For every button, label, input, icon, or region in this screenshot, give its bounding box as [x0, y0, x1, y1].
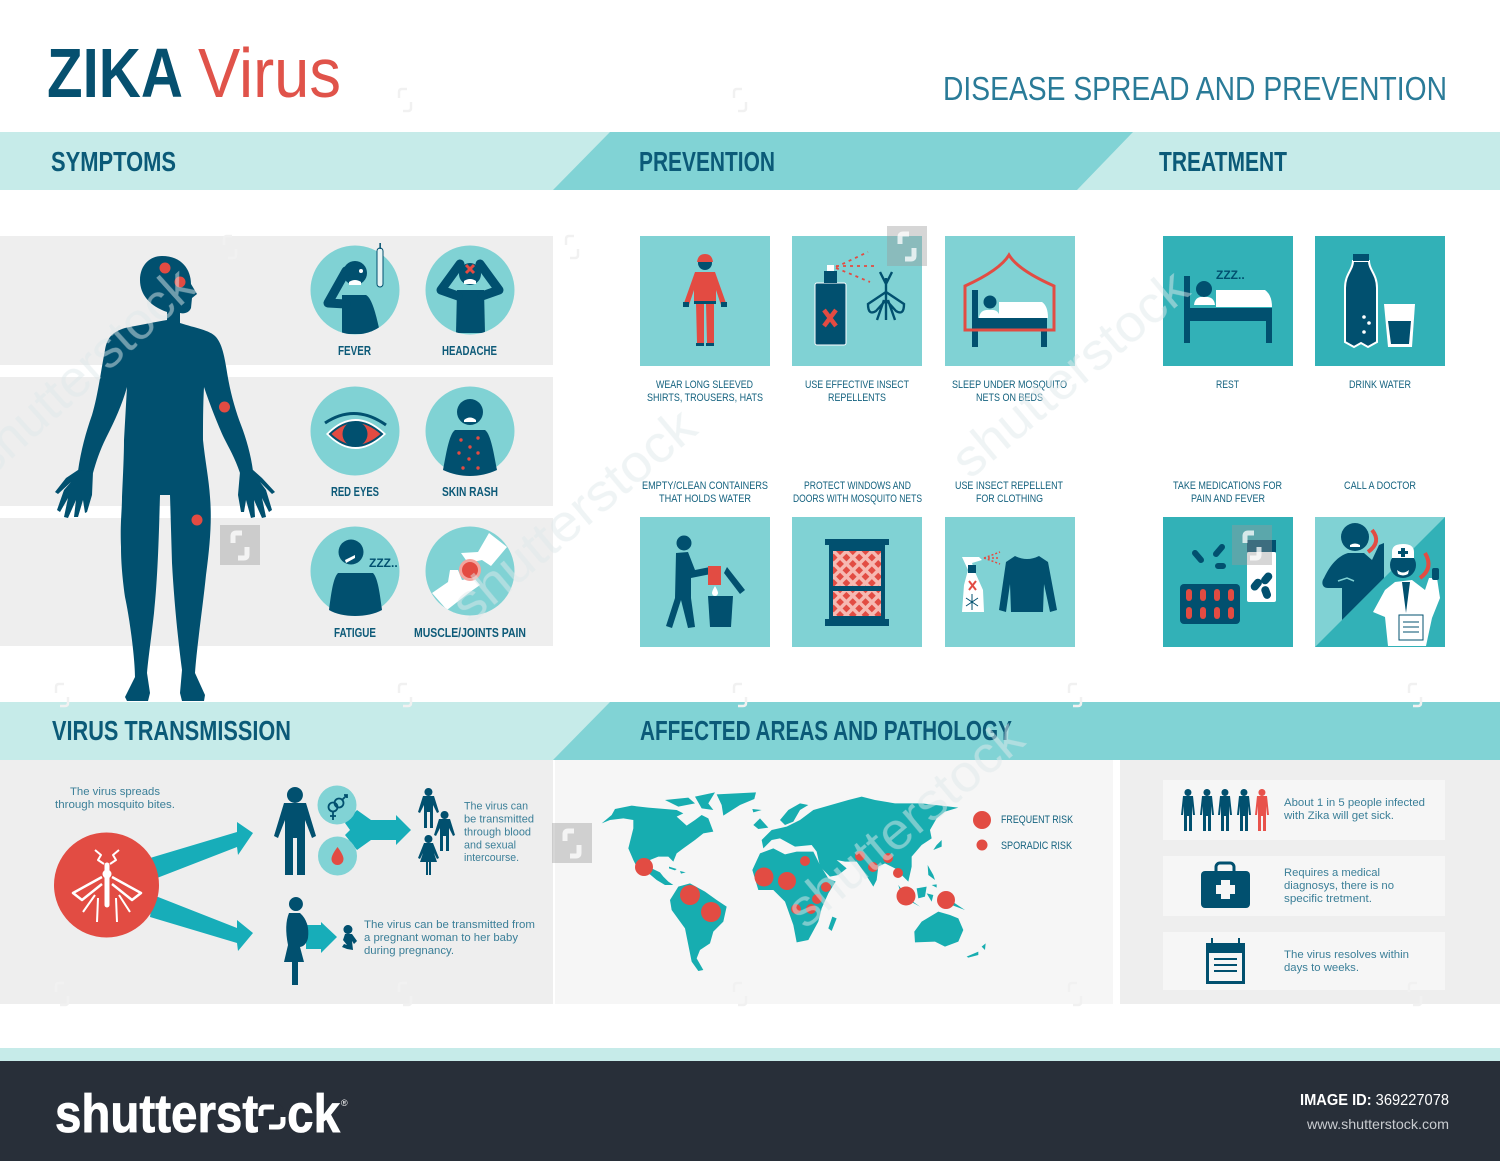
section header band: transmission and areas: VIRUS TRANSMISSION [52, 715, 291, 746]
tile: repellent for clothing: FOR CLOTHING [976, 493, 1043, 505]
tile: repellent for clothing [945, 480, 1075, 647]
card: medical diagnosis: diagnosys, there is no [1284, 880, 1394, 892]
arrow: to human transmission [150, 822, 253, 878]
panel: affected areas map [555, 760, 1113, 1004]
icon: fatigue [310, 526, 400, 640]
tile: call a doctor: CALL A DOCTOR [1344, 480, 1416, 492]
icon: muscle and joints pain: MUSCLE/JOINTS PAIN [414, 625, 526, 640]
arrow: combined transmission [345, 810, 411, 850]
human body silhouette with red symptom points [55, 256, 275, 701]
icon: fatigue: FATIGUE [334, 625, 376, 640]
title: Virus [198, 34, 341, 112]
icon: fever [310, 243, 400, 358]
icon: family [418, 788, 455, 875]
icon: headache [426, 246, 514, 358]
map legend: SPORADIC RISK [1001, 840, 1073, 852]
icon: baby [342, 925, 357, 950]
map legend [973, 811, 1074, 852]
card: medical diagnosis: specific tretment. [1284, 893, 1372, 905]
icon: fever: FEVER [338, 343, 371, 358]
icon: muscle and joints pain [414, 526, 526, 640]
tile: insect repellent [792, 236, 922, 404]
tile: protect windows and doors: PROTECT WINDOWS AND [804, 480, 911, 492]
tile: drink water [1315, 236, 1445, 391]
tile: wear long sleeved clothing: WEAR LONG SLEEVED [656, 379, 753, 391]
tile: insect repellent: REPELLENTS [828, 392, 886, 404]
footer band: IMAGE ID: 369227078 [1300, 1092, 1449, 1109]
text: blood and sexual transmission: be transmitted [464, 814, 534, 826]
section header band: symptoms, prevention, treatment [0, 132, 1500, 190]
tile: rest: REST [1216, 379, 1239, 391]
section header band: symptoms, prevention, treatment: PREVENTION [639, 146, 775, 177]
icon: mosquito in red circle [54, 832, 159, 938]
tile: repellent for clothing: USE INSECT REPELLENT [955, 480, 1063, 492]
section header band: transmission and areas: AFFECTED AREAS AND PATHOLOGY [640, 715, 1012, 746]
icon: fatigue: ZZZ.. [369, 556, 398, 570]
icon: skin rash: SKIN RASH [442, 484, 498, 499]
text: pregnancy transmission: during pregnancy. [364, 945, 454, 957]
card: resolves within days [1163, 932, 1445, 990]
tile: protect windows and doors: DOORS WITH MOSQUITO NETS [793, 493, 922, 505]
section header band: transmission and areas [0, 702, 1500, 760]
card: 1 in 5 people: with Zika will get sick. [1283, 810, 1394, 822]
tile: take medications: PAIN AND FEVER [1191, 493, 1265, 505]
text: mosquito bites: The virus spreads [70, 786, 161, 798]
watermark overlay: shutterstock [775, 708, 1036, 939]
icon: pregnant woman [284, 897, 308, 985]
text: mosquito bites [55, 786, 175, 811]
card: medical diagnosis [1163, 856, 1445, 916]
tile: insect repellent: USE EFFECTIVE INSECT [805, 379, 909, 391]
world map [602, 792, 986, 971]
icon: headache: HEADACHE [442, 343, 497, 358]
doctor on the phone [1373, 544, 1440, 646]
watermark overlay: shutterstock [940, 258, 1201, 489]
section header band: symptoms, prevention, treatment: SYMPTOMS [51, 146, 176, 177]
icon: sex symbol circle [318, 786, 356, 824]
footer band: www.shutterstock.com [1306, 1116, 1449, 1132]
tile: take medications: TAKE MEDICATIONS FOR [1173, 480, 1282, 492]
text: blood and sexual transmission: and sexual [464, 840, 516, 852]
tile: take medications [1163, 480, 1293, 647]
tile: empty containers: EMPTY/CLEAN CONTAINERS [642, 480, 768, 492]
footer band [0, 1048, 1500, 1161]
left hand [55, 470, 93, 518]
title: ZIKA [47, 34, 183, 112]
map legend: FREQUENT RISK [1001, 814, 1074, 826]
tile: call a doctor [1315, 480, 1445, 647]
text: blood and sexual transmission: The virus can [464, 800, 528, 812]
panel: virus transmission [0, 760, 553, 1004]
panel: pathology [1120, 760, 1500, 1004]
tile: wear long sleeved clothing [640, 236, 770, 404]
arrow: mother to baby [306, 922, 337, 953]
watermark overlay: shutterstock [440, 396, 708, 634]
title [47, 34, 341, 112]
tile: drink water: DRINK WATER [1349, 379, 1411, 391]
tile: rest: ZZZ.. [1216, 268, 1245, 282]
watermark overlay [0, 89, 1421, 1005]
card: 1 in 5 people: About 1 in 5 people infected [1284, 797, 1425, 809]
text: pregnancy transmission [364, 919, 535, 957]
icon: blood drop circle [318, 836, 357, 876]
tile: wear long sleeved clothing: SHIRTS, TROUSERS, HATS [647, 392, 763, 404]
footer band: ® [341, 1098, 348, 1108]
card: 1 in 5 people [1163, 780, 1445, 840]
man on the phone [1322, 523, 1384, 620]
text: mosquito bites: through mosquito bites. [55, 799, 175, 811]
tile: empty containers: THAT HOLDS WATER [659, 493, 751, 505]
footer band: shutterstock [55, 1084, 341, 1144]
icon: red eyes: RED EYES [331, 484, 379, 499]
tile: sleep under mosquito net: NETS ON BEDS [976, 392, 1043, 404]
icon: red eyes [310, 386, 400, 499]
icon: man [274, 787, 316, 875]
section header band: symptoms, prevention, treatment: TREATMENT [1159, 146, 1287, 177]
text: pregnancy transmission: The virus can be transmitted from [364, 919, 535, 931]
tile: empty containers [640, 480, 770, 647]
icon: skin rash [426, 386, 514, 499]
card: resolves within days: The virus resolves within [1284, 949, 1409, 961]
text: pregnancy transmission: a pregnant woman to her baby [364, 932, 519, 944]
tile: sleep under mosquito net [945, 236, 1075, 404]
card: resolves within days: days to weeks. [1284, 962, 1359, 974]
card: medical diagnosis: Requires a medical [1284, 867, 1380, 879]
text: blood and sexual transmission: intercourse. [464, 852, 519, 864]
risk points [635, 851, 955, 922]
text: blood and sexual transmission: through blood [464, 826, 531, 838]
text: blood and sexual transmission [464, 800, 534, 864]
panel: symptom rows background [0, 236, 553, 646]
tile: rest [1163, 236, 1293, 391]
arrow: to pregnancy transmission [150, 895, 253, 951]
right hand [238, 470, 275, 518]
tile: sleep under mosquito net: SLEEP UNDER MOSQUITO [952, 379, 1067, 391]
tile: protect windows and doors [792, 480, 922, 647]
